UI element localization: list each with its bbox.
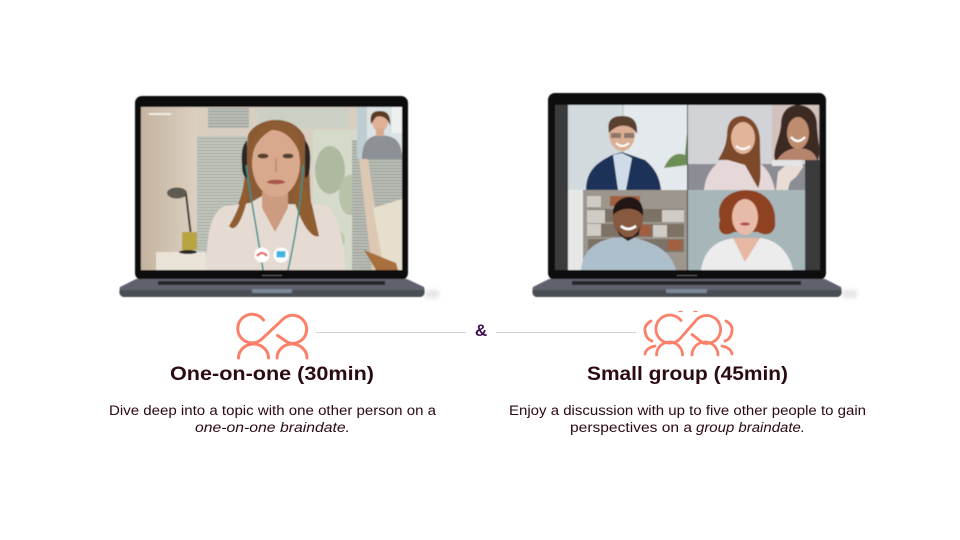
- text block: small group description: perspectives on a: [570, 420, 693, 435]
- text block: one-on-one description: Dive deep into a topic with one other person on a: [109, 403, 437, 418]
- text block: one-on-one description: one-on-one braindate.: [195, 420, 350, 435]
- heading: small group: Small group (45min): [587, 364, 788, 385]
- hair back: [238, 119, 312, 205]
- icon: end call button: [254, 248, 270, 262]
- text block: small group description: group braindate.: [696, 420, 805, 435]
- text block: small group description: [509, 403, 866, 435]
- heading: one-on-one: One-on-one (30min): [170, 364, 374, 385]
- laptop: small group video call: [532, 93, 857, 298]
- laptop: one-on-one video call: [119, 96, 439, 298]
- divider with ampersand: &: [475, 321, 487, 340]
- video tile: man in blazer: [568, 105, 687, 190]
- text block: small group description: Enjoy a discussion with up to five other people to gain: [509, 403, 866, 418]
- text block: one-on-one description: [109, 403, 437, 435]
- video tile: man laughing by bookshelf: [568, 190, 687, 270]
- video tile: woman waving: [688, 105, 805, 190]
- video tile: woman with curly hair: [772, 105, 819, 160]
- icon: chat button: [274, 248, 288, 262]
- icon: two people pair: [238, 314, 307, 358]
- video tile: older woman with red hair: [688, 190, 805, 270]
- icon: small group: [645, 312, 732, 355]
- shirt: [206, 196, 345, 270]
